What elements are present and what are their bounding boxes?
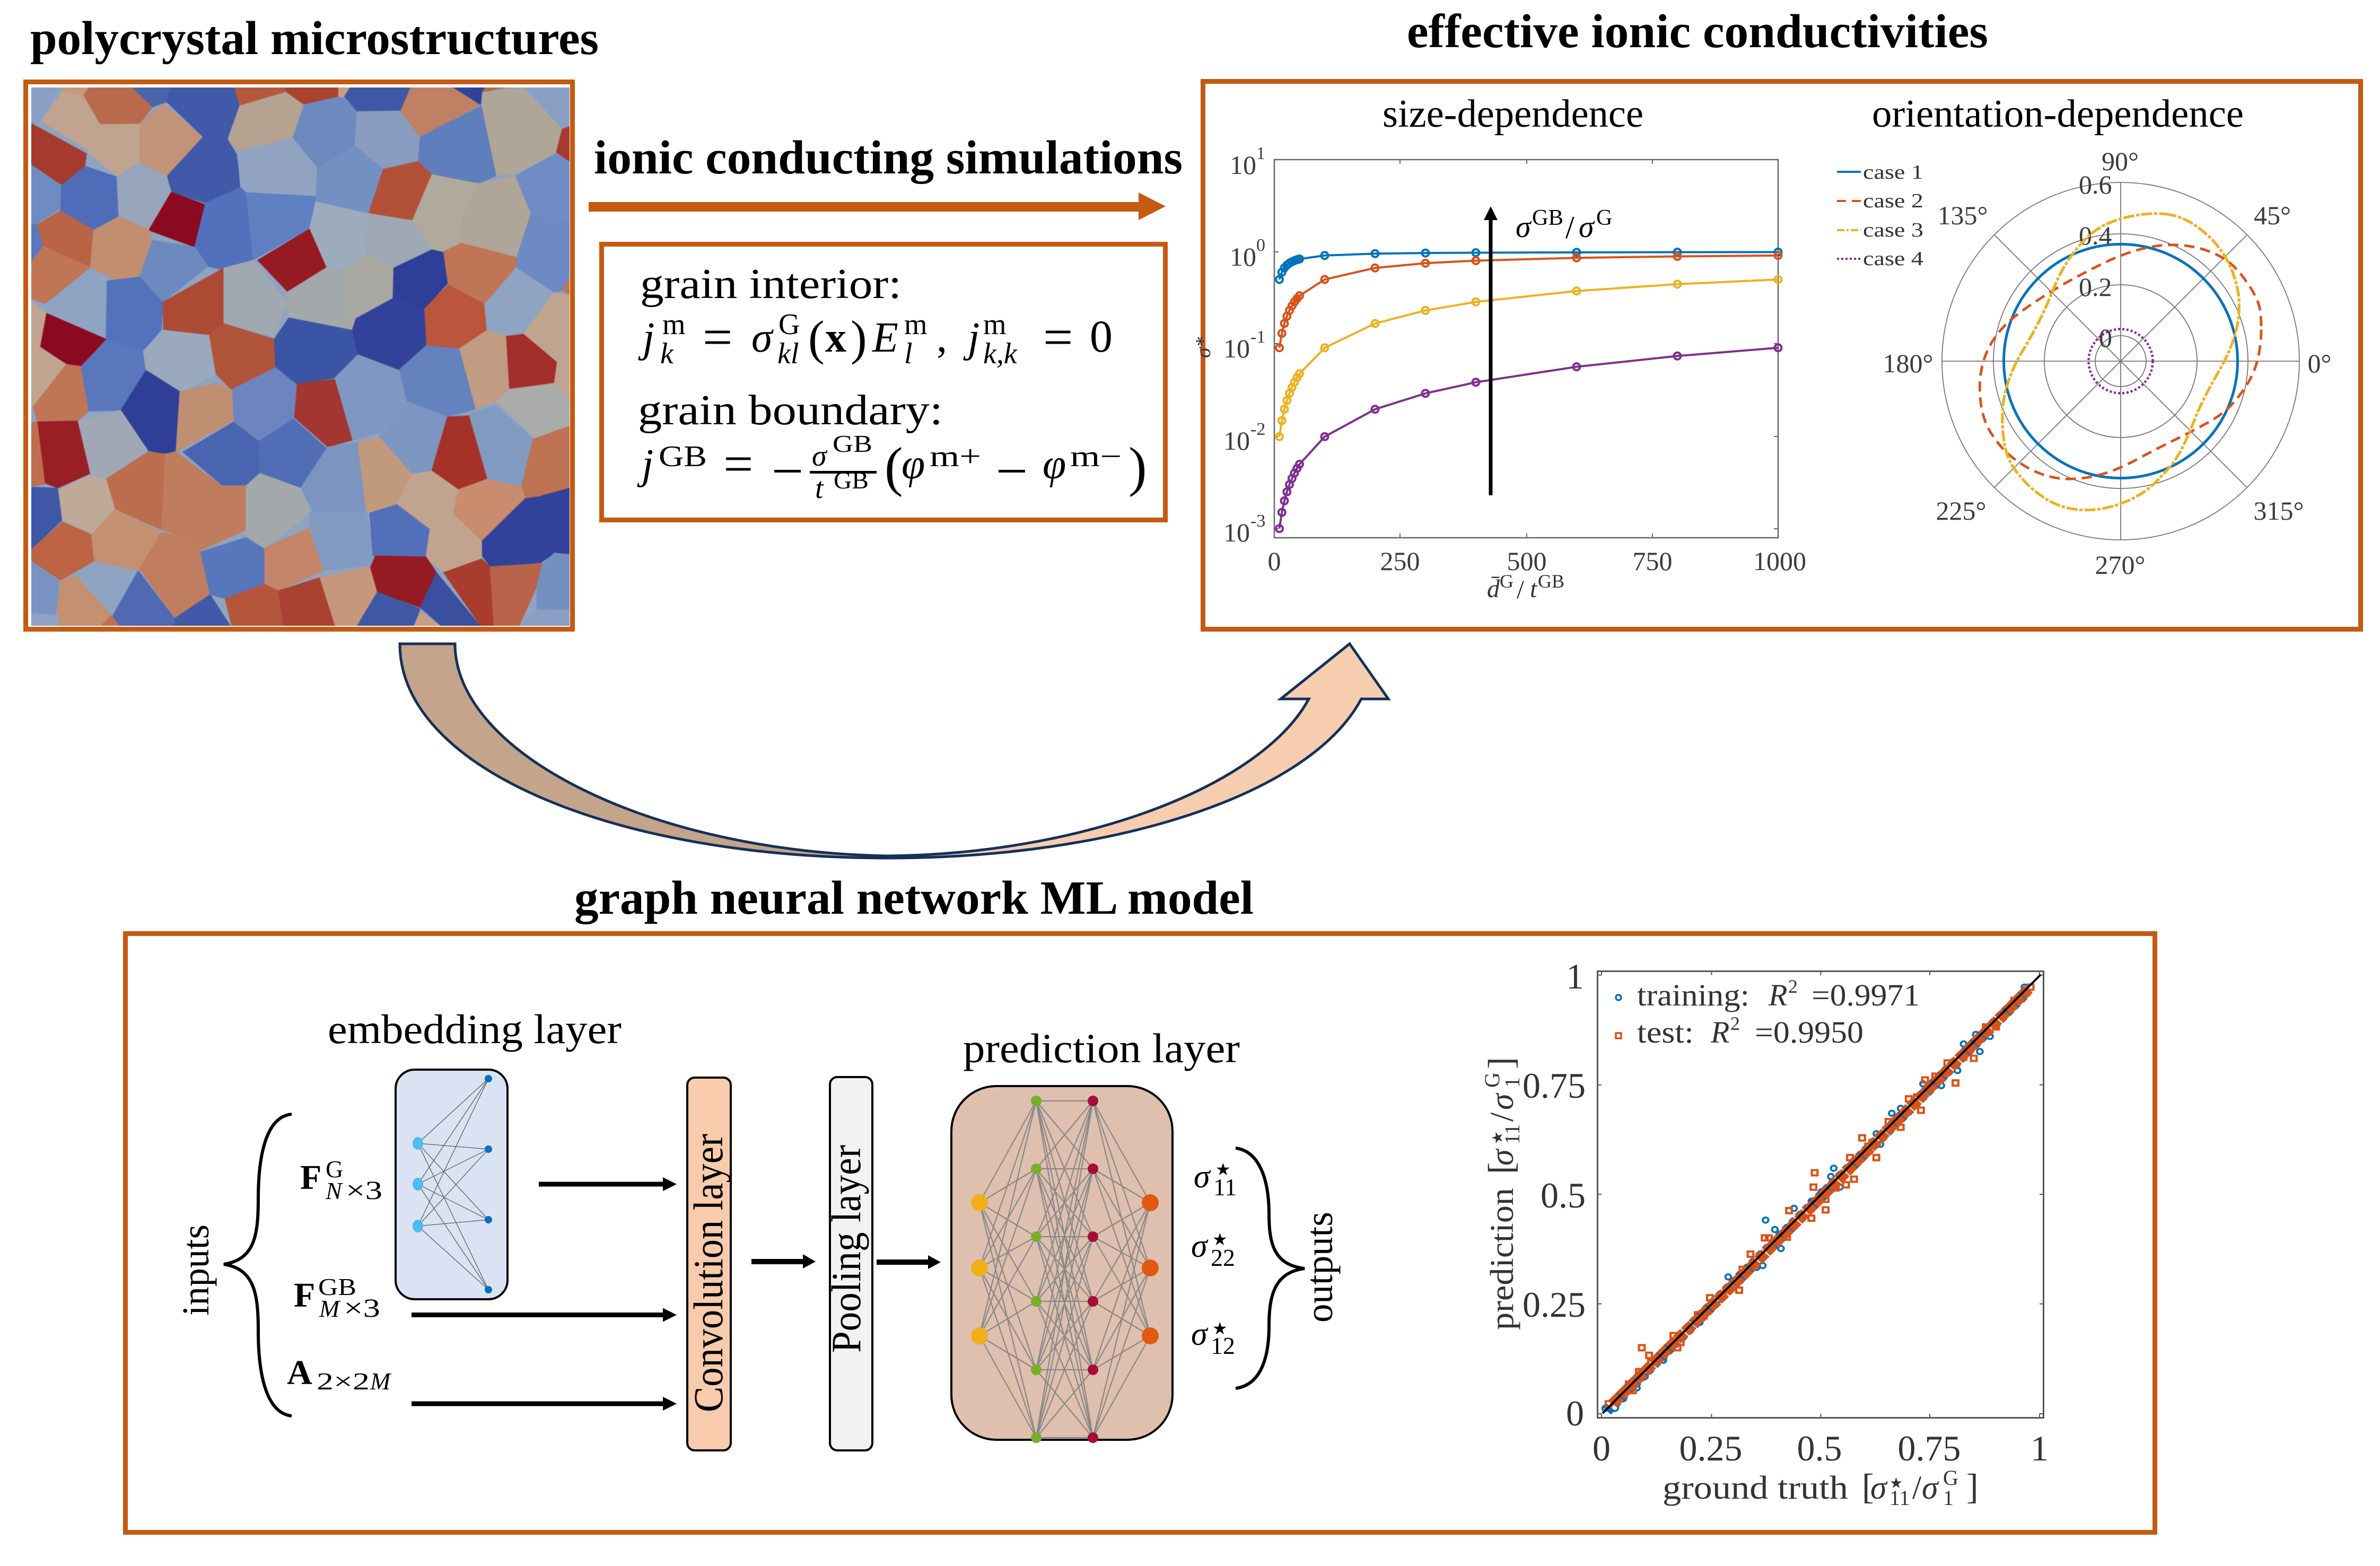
y tick labels: 0.75 <box>1522 1065 1586 1106</box>
block: prediction layer network <box>951 1086 1172 1443</box>
heading: ionic conducting simulations: ionic conducting simulations <box>594 132 1183 184</box>
x tick labels: 250 <box>1380 546 1420 576</box>
x axis label: / <box>1912 1470 1922 1506</box>
output: sigma 11: σ <box>1194 1159 1211 1195</box>
curve: case 3 <box>2002 214 2239 510</box>
text: grain interior: grain interior: <box>640 261 902 308</box>
label: embedding layer: embedding layer <box>328 1006 622 1052</box>
equation: grain boundary: ( <box>885 436 903 497</box>
y axis label: prediction <box>1484 1188 1520 1330</box>
legend: training: <box>1637 978 1749 1012</box>
x tick labels: 0 <box>1592 1428 1611 1468</box>
polar tick labels: 0.6 <box>2079 170 2112 199</box>
equation: grain interior: = <box>703 308 732 366</box>
legend: case 4 <box>1863 248 1923 270</box>
equation: grain boundary: GB <box>834 467 869 494</box>
equation: grain interior: x <box>825 314 846 361</box>
equation: grain boundary: GB <box>659 440 707 473</box>
heading: graph neural network ML model: graph neural network ML model <box>574 872 1254 924</box>
polar tick labels: 270° <box>2095 550 2146 580</box>
chart: orientation polar plot <box>1837 146 2331 580</box>
output: sigma 11 <box>1194 1159 1237 1201</box>
label: prediction layer: prediction layer <box>963 1025 1240 1071</box>
x tick labels: 0 <box>1267 546 1281 576</box>
equation: grain boundary: φ <box>1043 441 1066 488</box>
panel: governing equations <box>601 244 1166 520</box>
output: sigma 12: ★ <box>1212 1318 1228 1338</box>
x axis label: / <box>1517 574 1524 604</box>
y axis label: / <box>1484 1112 1520 1122</box>
y tick labels <box>1522 956 1586 1433</box>
y tick labels: 0.25 <box>1522 1284 1586 1325</box>
y axis label: σ* <box>1191 337 1215 358</box>
output: sigma 22: ★ <box>1212 1229 1228 1249</box>
brace: outputs <box>1236 1148 1305 1388</box>
polar tick labels <box>1883 146 2331 580</box>
data: training points <box>1603 984 2027 1411</box>
y axis label: σ <box>1484 1092 1520 1110</box>
input: adjacency <box>287 1353 392 1395</box>
label: inputs: inputs <box>174 1224 217 1316</box>
y tick labels: 10 <box>1223 518 1250 547</box>
y axis label: 1 <box>1500 1077 1524 1088</box>
equation: grain interior: j <box>638 314 654 361</box>
x tick labels: 750 <box>1632 546 1673 576</box>
image: voronoi grain map <box>31 88 570 626</box>
y tick labels: -3 <box>1250 511 1265 531</box>
equation: grain interior: = <box>1043 308 1073 366</box>
arrow: increasing ratio <box>1484 206 1498 495</box>
polar tick labels: 0 <box>2099 323 2112 353</box>
curve: case 4 <box>2088 329 2153 393</box>
equation: grain interior: G <box>778 308 800 341</box>
polar tick labels: 135° <box>1938 200 1988 230</box>
panel: polycrystal microstructure <box>25 82 573 629</box>
equation: grain interior: , <box>937 314 947 361</box>
legend: R <box>1710 1015 1729 1049</box>
equation: grain interior: l <box>904 337 913 370</box>
input: grain features <box>300 1156 382 1205</box>
y tick labels: 10 <box>1223 334 1250 363</box>
equation: grain interior: m <box>983 308 1007 341</box>
legend: case 1 <box>1863 161 1923 183</box>
x axis label: G <box>1943 1466 1958 1490</box>
y tick labels: 0 <box>1566 1393 1584 1433</box>
equation: grain boundary <box>637 430 1147 505</box>
legend: =0.9971 <box>1812 978 1920 1012</box>
legend: case 3 <box>1863 219 1923 241</box>
equation: grain interior: m <box>904 308 928 341</box>
polar tick labels: 90° <box>2102 146 2139 176</box>
curve: blue <box>1276 249 1782 283</box>
x axis label: 11 <box>1889 1486 1910 1510</box>
legend: 2 <box>1788 976 1798 997</box>
y tick labels: 0.5 <box>1541 1175 1586 1215</box>
input: boundary features: ×3 <box>344 1293 380 1323</box>
curve: orange <box>1276 252 1782 351</box>
arrow: pooling to prediction <box>877 1255 941 1269</box>
output: sigma 22 <box>1191 1228 1235 1271</box>
legend <box>1837 161 1923 270</box>
input: grain features: F <box>300 1158 321 1197</box>
polar tick labels: 225° <box>1936 496 1987 526</box>
equation: grain interior: ( <box>808 311 825 365</box>
arrow: adjacency to convolution <box>412 1397 677 1411</box>
x axis label: GB <box>1538 571 1564 592</box>
legend <box>1616 976 1920 1049</box>
y tick labels: 1 <box>1566 956 1584 996</box>
equation: grain boundary: j <box>637 441 653 488</box>
brace: inputs <box>224 1114 292 1416</box>
x axis label: ] <box>1966 1466 1979 1507</box>
label: outputs: outputs <box>1298 1212 1341 1323</box>
equation: grain interior: j <box>963 314 979 361</box>
input: adjacency: A <box>287 1353 312 1392</box>
equation: grain boundary: m− <box>1070 440 1122 473</box>
curve: case 1 <box>2003 244 2238 478</box>
chart: parity plot <box>1480 956 2049 1510</box>
equation: grain interior: k <box>660 337 674 370</box>
curve: purple <box>1276 344 1782 532</box>
y tick labels: 10 <box>1223 426 1250 456</box>
output: sigma 11: 11 <box>1213 1174 1237 1201</box>
data: test points <box>1606 984 2033 1406</box>
y axis label: ★ <box>1489 1131 1506 1144</box>
equation: grain interior: ) <box>851 311 867 365</box>
block: pooling layer: Pooling layer <box>823 1145 869 1353</box>
equation: grain boundary: = <box>723 434 753 493</box>
input: grain features: ×3 <box>346 1175 382 1205</box>
arrow: curved ML surrogate <box>400 644 1388 858</box>
title: effective ionic conductivities: effective ionic conductivities <box>1407 5 1988 58</box>
output: sigma 12: σ <box>1191 1316 1209 1352</box>
label: conductivity ratio <box>1516 206 1612 245</box>
equation: grain interior: σ <box>751 314 774 361</box>
x tick labels: 1000 <box>1753 546 1806 576</box>
input: grain features: G <box>326 1156 343 1183</box>
input: boundary features <box>294 1273 380 1323</box>
output: sigma 11: ★ <box>1215 1159 1231 1179</box>
reference line <box>1603 975 2041 1413</box>
arrow: simulations <box>589 193 1166 220</box>
label: conductivity ratio: GB <box>1532 206 1563 230</box>
curve: yellow <box>1276 276 1782 440</box>
y tick labels: -2 <box>1250 419 1265 439</box>
arrow: convolution to pooling <box>751 1254 816 1268</box>
output: sigma 12 <box>1191 1316 1235 1359</box>
input: boundary features: M <box>319 1295 341 1322</box>
x axis label: 1 <box>1943 1486 1954 1510</box>
x axis label: σ <box>1870 1470 1888 1506</box>
x tick labels: 500 <box>1507 546 1546 576</box>
y axis label: σ <box>1484 1148 1520 1166</box>
x tick labels: 1 <box>2031 1428 2049 1468</box>
output: sigma 12: 12 <box>1211 1332 1235 1359</box>
y axis label <box>1480 1057 1524 1330</box>
heading: size-dependence: size-dependence <box>1382 92 1643 136</box>
input: adjacency: M <box>370 1368 392 1395</box>
arrow: boundary to convolution <box>412 1308 677 1322</box>
polar tick labels: 0.2 <box>2079 272 2112 302</box>
equation: grain boundary: GB <box>833 430 872 457</box>
x axis label <box>1662 1466 1979 1510</box>
output: sigma 22: 22 <box>1211 1244 1235 1271</box>
y tick labels <box>1223 144 1265 547</box>
polar tick labels: 0.4 <box>2079 221 2112 250</box>
y axis label: 11 <box>1500 1124 1524 1144</box>
legend: test: <box>1637 1015 1694 1049</box>
polar grid <box>1942 182 2299 540</box>
y tick labels: 10 <box>1230 150 1256 180</box>
equation: grain boundary: m+ <box>930 440 981 473</box>
x axis label: ★ <box>1889 1474 1903 1492</box>
y axis label: G <box>1480 1072 1504 1088</box>
equation: grain boundary: ) <box>1128 436 1147 497</box>
legend: 2 <box>1730 1013 1740 1034</box>
polar tick labels: 45° <box>2254 200 2291 230</box>
y tick labels: 1 <box>1256 144 1265 163</box>
equation: grain interior: k,k <box>983 337 1018 370</box>
input: adjacency: 2×2 <box>317 1368 370 1395</box>
x tick labels: 0.5 <box>1797 1428 1842 1468</box>
x tick labels <box>1592 1428 2049 1468</box>
y axis label: [ <box>1481 1162 1521 1174</box>
input: grain features: N <box>325 1177 343 1204</box>
output: sigma 22: σ <box>1191 1228 1209 1264</box>
polar tick labels: 315° <box>2254 496 2304 526</box>
y tick labels: 0 <box>1256 235 1265 255</box>
x axis label: ground truth <box>1662 1470 1848 1506</box>
arrow: embedding to convolution <box>539 1177 677 1191</box>
equation: grain interior: kl <box>777 337 799 370</box>
input: boundary features: F <box>294 1276 315 1315</box>
equation: grain boundary: t <box>815 472 824 505</box>
block: convolution layer: Convolution layer <box>685 1134 731 1412</box>
equation: grain boundary: φ <box>902 441 925 488</box>
chart: size dependence <box>1191 144 1806 604</box>
label: conductivity ratio: σ <box>1516 209 1532 244</box>
x tick labels: 0.75 <box>1897 1428 1961 1468</box>
equation: grain interior: 0 <box>1090 311 1113 362</box>
polar tick labels: 0° <box>2308 348 2331 378</box>
equation: grain interior: E <box>872 314 898 361</box>
legend: R <box>1768 978 1787 1012</box>
x axis label: t <box>1530 575 1538 603</box>
x axis label: [ <box>1862 1466 1874 1507</box>
heading: orientation-dependence: orientation-dependence <box>1872 92 2244 136</box>
x axis label: G <box>1500 571 1513 592</box>
label: conductivity ratio: σ <box>1579 209 1595 244</box>
legend: =0.9950 <box>1755 1015 1863 1049</box>
panel: effective conductivities <box>1191 82 2361 629</box>
polar tick labels: 180° <box>1883 348 1933 378</box>
x axis label: d̄ <box>1487 575 1500 603</box>
equation: grain interior <box>638 308 1113 370</box>
x axis label: σ <box>1922 1470 1939 1506</box>
block: embedding layer network <box>396 1070 508 1299</box>
y axis label: ] <box>1481 1057 1521 1069</box>
panel: graph neural network <box>125 933 2155 1533</box>
title: polycrystal microstructures: polycrystal microstructures <box>30 12 599 65</box>
label: conductivity ratio: G <box>1596 206 1612 230</box>
y tick labels: 10 <box>1230 242 1256 272</box>
block: pooling layer <box>823 1077 872 1450</box>
equation: grain interior: m <box>662 308 686 341</box>
curve: case 2 <box>1980 245 2261 479</box>
x axis label <box>1487 571 1564 604</box>
text: grain boundary: grain boundary: <box>638 387 943 434</box>
input: boundary features: GB <box>318 1273 356 1300</box>
x tick labels <box>1267 546 1806 576</box>
y tick labels: -1 <box>1250 327 1265 347</box>
label: conductivity ratio: / <box>1565 210 1574 245</box>
legend: case 2 <box>1863 190 1923 212</box>
equation: grain boundary: σ <box>812 440 828 473</box>
x tick labels: 0.25 <box>1679 1428 1743 1468</box>
